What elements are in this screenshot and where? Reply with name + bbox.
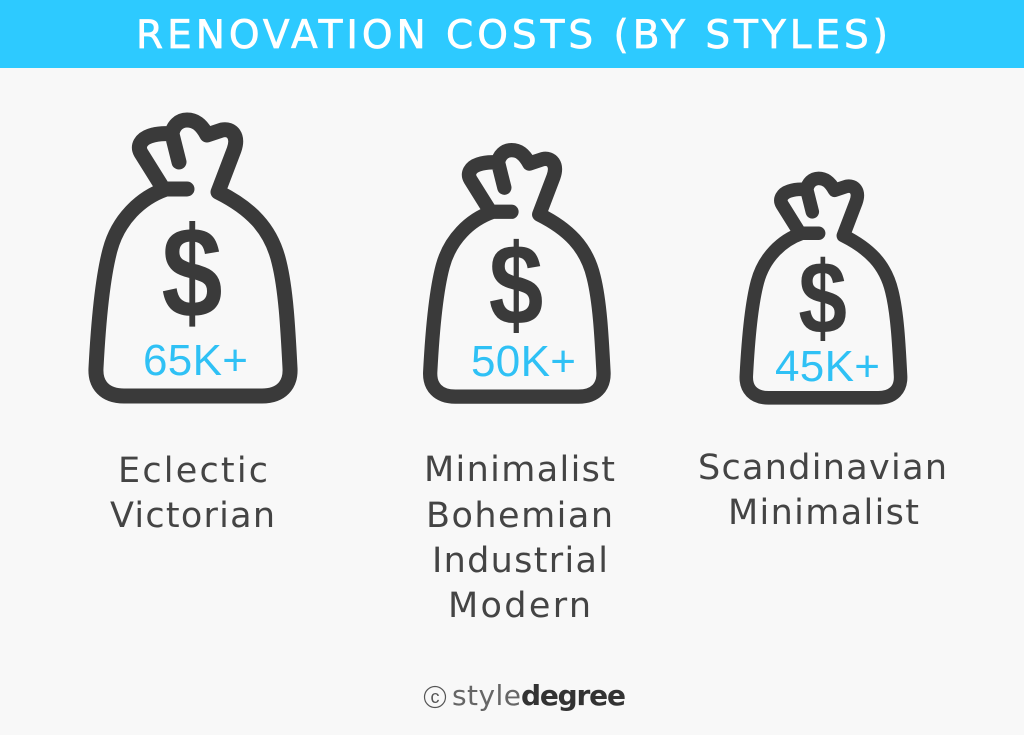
label: style list: Bohemian bbox=[426, 496, 613, 536]
icon: money bag small bbox=[746, 178, 901, 398]
label: style list: Industrial bbox=[432, 541, 608, 581]
label: Eclectic Victorian: Victorian bbox=[110, 496, 275, 536]
value 50K+: 50K+ bbox=[471, 337, 576, 386]
icon: money bag large: $ bbox=[161, 201, 223, 345]
icon: money bag medium: $ bbox=[489, 220, 543, 349]
icon: money bag large bbox=[96, 120, 290, 396]
value 65K+: 65K+ bbox=[143, 336, 248, 385]
panel: 45K+ bag bbox=[698, 178, 947, 533]
label: style list: Minimalist bbox=[424, 450, 615, 490]
title banner: RENOVATION COSTS (BY STYLES) bbox=[136, 13, 888, 58]
logo: styledegree: style bbox=[452, 679, 521, 712]
panel: 50K+ bag bbox=[424, 150, 615, 626]
icon: money bag medium bbox=[430, 150, 604, 397]
title banner bbox=[0, 0, 1024, 68]
label: style list: Modern bbox=[448, 586, 591, 626]
logo: styledegree: degree bbox=[521, 679, 626, 712]
label: style list bbox=[424, 450, 615, 626]
panel: 65K+ bag bbox=[96, 120, 290, 536]
icon: money bag small: $ bbox=[798, 242, 847, 356]
value 45K+: 45K+ bbox=[775, 342, 880, 391]
label: Scandinavian Minimalist: Minimalist bbox=[728, 493, 919, 533]
logo: styledegree bbox=[424, 679, 626, 712]
label: Eclectic Victorian: Eclectic bbox=[118, 451, 268, 491]
label: Scandinavian Minimalist bbox=[698, 448, 947, 533]
logo: styledegree: c bbox=[430, 687, 440, 707]
label: Scandinavian Minimalist: Scandinavian bbox=[698, 448, 947, 488]
label: Eclectic Victorian bbox=[110, 451, 275, 536]
